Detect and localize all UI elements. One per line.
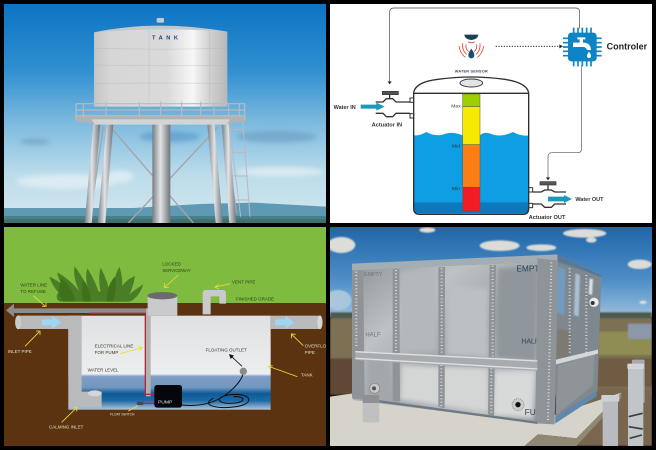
labels: FLOAT SWITCH [110,413,135,417]
labels: FOR PUMP [95,350,118,355]
electrical line [89,313,155,403]
top frame [352,254,601,277]
overflow arrow [275,316,294,329]
concrete slab [330,393,621,446]
grass background [4,227,326,304]
labels: FLOATING OUTLET [206,348,247,353]
vent pipe [203,290,226,314]
locked serviceway [147,292,177,316]
field background [330,312,652,395]
ground at right [568,388,652,446]
diagram background [330,4,652,223]
tank water [414,132,463,213]
valve port [512,399,524,411]
panel: water level control diagram [330,4,652,223]
tank outline [414,77,529,214]
gauge labels: Max [451,104,461,110]
side fitting [589,298,599,307]
inlet pipe [15,316,102,408]
gauge labels: Min [452,186,460,192]
icon: water sensor [459,35,484,58]
tank markings: HALF [521,339,539,346]
floating outlet hose [182,368,249,408]
tank bottom sediment [414,202,529,213]
icon: controller chip [563,28,602,66]
pump: PUMP [158,400,173,406]
labels: ELECTRICAL LINE [95,344,133,349]
gauge labels [451,104,461,192]
soil [4,303,326,446]
foreground pipe centre [601,395,619,446]
arrow: water out [548,195,572,203]
tank markings: EMPTY [516,264,545,274]
horizontal band [355,350,598,371]
cross braces [92,127,237,223]
panel: underground tank cross-section [4,227,327,446]
bolt rows [356,262,586,422]
tank markings: EMPTY [364,272,383,278]
actuator out label: Actuator OUT [529,215,566,221]
tank markings [364,264,545,417]
labels: CALMING INLET [49,424,84,429]
inlet arrow [42,316,61,329]
tank hatch [460,79,483,87]
foreground pipe left [363,383,380,422]
labels [8,262,327,429]
slab edge [525,393,621,446]
tank logo: TANK [152,35,179,41]
black arrow to floating outlet [229,354,242,366]
clouds [325,227,652,310]
water out label: Water OUT [575,197,604,203]
panel: elevated water tower photo [4,4,326,223]
actuator in label: Actuator IN [372,123,402,129]
vertical ribs [352,258,558,424]
labels: PIPE [305,350,315,355]
tank front face [352,262,541,423]
water in label: Water IN [334,105,356,111]
overflow pipe [271,316,322,329]
tower legs [85,124,236,223]
labels: INLET PIPE [8,349,32,354]
reflections [366,267,538,418]
labels: TANK [301,373,313,378]
valve: actuator in [376,91,414,118]
clouds [17,131,323,189]
pump [154,385,182,408]
gauge labels: Mid [452,144,460,150]
float switch [137,402,143,405]
labels: WATER LEVEL [88,368,119,373]
labels: OVERFLO [305,344,327,349]
tank markings: HALF [365,333,381,339]
yellow leader arrows [25,275,303,422]
water line to refuse [6,304,151,396]
panel: galvanized steel tank photo [325,227,652,446]
platform with railing [75,102,246,125]
level gauge [463,94,480,211]
tank side face [555,262,601,423]
control line to actuator out [546,65,582,180]
labels: TO REFUSE [20,289,46,294]
water sensor label: WATER SENSOR [455,69,488,73]
labels: LOCKED [162,262,182,267]
base channel [378,400,537,424]
side panels with sky reflections [556,267,595,415]
water in tank [68,374,271,410]
sky [330,227,652,317]
labels: WATER LINE [20,283,47,288]
control line to actuator in [388,8,580,84]
sky [4,4,326,223]
labels: VENT PIPE [232,280,255,285]
tank body [94,18,227,107]
foreground pipes right [627,360,645,446]
labels: FINISHED GRADE [236,297,274,302]
distant hills and ground [4,203,326,223]
ladder [229,121,250,217]
dotted arrow: sensor to controller [496,44,563,48]
tank interior [68,316,271,374]
plants [49,266,143,302]
arrow: water in [361,103,385,111]
controller label: Controler [607,42,648,52]
tank markings: FULL [525,407,545,417]
labels: SERVICEWAY [162,268,191,273]
valve: actuator out [529,182,566,208]
